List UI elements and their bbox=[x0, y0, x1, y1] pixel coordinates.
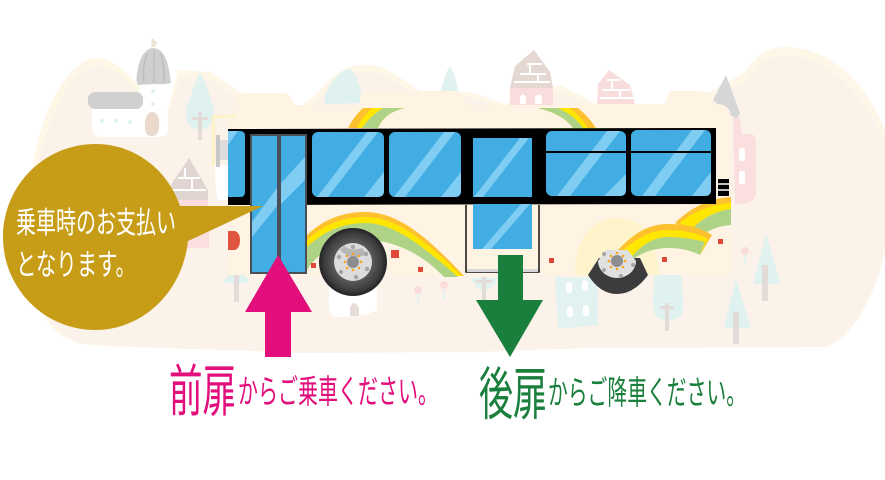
tree triangle upper bbox=[753, 234, 781, 301]
dome tree centre bbox=[325, 68, 362, 104]
bubble shape bbox=[3, 144, 263, 330]
red markers bbox=[311, 239, 723, 272]
passenger window 2 bbox=[389, 132, 461, 197]
caption: front door: からご乗車ください。 bbox=[238, 373, 438, 410]
side mirror bbox=[212, 115, 236, 200]
hills outline bbox=[31, 47, 885, 353]
passenger window 3 bbox=[546, 131, 626, 196]
front door bbox=[250, 134, 307, 274]
yellow circle behind rear wheel bbox=[575, 218, 658, 275]
tree under rear door bbox=[471, 277, 498, 300]
rear door step bbox=[467, 269, 538, 272]
background: hills and town scenery bbox=[31, 38, 885, 353]
front window bbox=[228, 131, 245, 197]
green arrow: rear door exit bbox=[476, 255, 543, 357]
speech bubble bbox=[3, 144, 263, 330]
brick house left bbox=[171, 158, 208, 212]
rear door upper window bbox=[473, 138, 532, 197]
bus body bbox=[228, 91, 731, 275]
rainbow front bbox=[307, 212, 464, 277]
ventilation grille bbox=[718, 179, 729, 196]
bubble text: 乗車時のお支払い bbox=[16, 207, 176, 240]
tree upper left bbox=[186, 72, 214, 140]
pink arrow: front door boarding bbox=[245, 255, 312, 357]
rainbow rear far bbox=[675, 197, 731, 234]
rear door frame bbox=[466, 205, 539, 272]
tree near front door bbox=[223, 262, 250, 302]
bus bbox=[212, 91, 731, 296]
hills fill bbox=[35, 56, 885, 353]
brick house centre bbox=[510, 50, 553, 105]
caption: rear door: 後扉 bbox=[479, 363, 547, 427]
passenger window 4 bbox=[631, 130, 711, 196]
tree triangle lower bbox=[724, 279, 751, 344]
rear wheel bbox=[588, 250, 648, 294]
tree rounded right bbox=[653, 275, 683, 331]
white house under front wheel bbox=[329, 285, 377, 317]
rainbow top right bbox=[538, 108, 596, 128]
caption: rear door: からご降車ください。 bbox=[548, 374, 746, 411]
passenger window 1 bbox=[312, 132, 384, 197]
blue house bbox=[555, 277, 598, 329]
red headlight bbox=[228, 231, 240, 250]
rainbow top left bbox=[348, 108, 405, 128]
rear door lower window bbox=[473, 204, 532, 249]
caption: rear door bbox=[479, 363, 746, 427]
tower right bbox=[713, 75, 756, 204]
window band bbox=[228, 128, 716, 205]
flowers bbox=[414, 247, 749, 303]
caption: front door bbox=[169, 360, 438, 423]
brick house pink bbox=[597, 70, 635, 104]
bubble text bbox=[16, 207, 176, 282]
rainbow rear near bbox=[618, 224, 712, 262]
pink house block behind bubble bbox=[184, 215, 209, 248]
front wheel bbox=[319, 228, 387, 296]
small tree centre bbox=[441, 66, 458, 91]
caption: front door: 前扉 bbox=[169, 360, 236, 423]
church with dome bbox=[88, 38, 171, 137]
bubble text: となります。 bbox=[16, 249, 136, 282]
